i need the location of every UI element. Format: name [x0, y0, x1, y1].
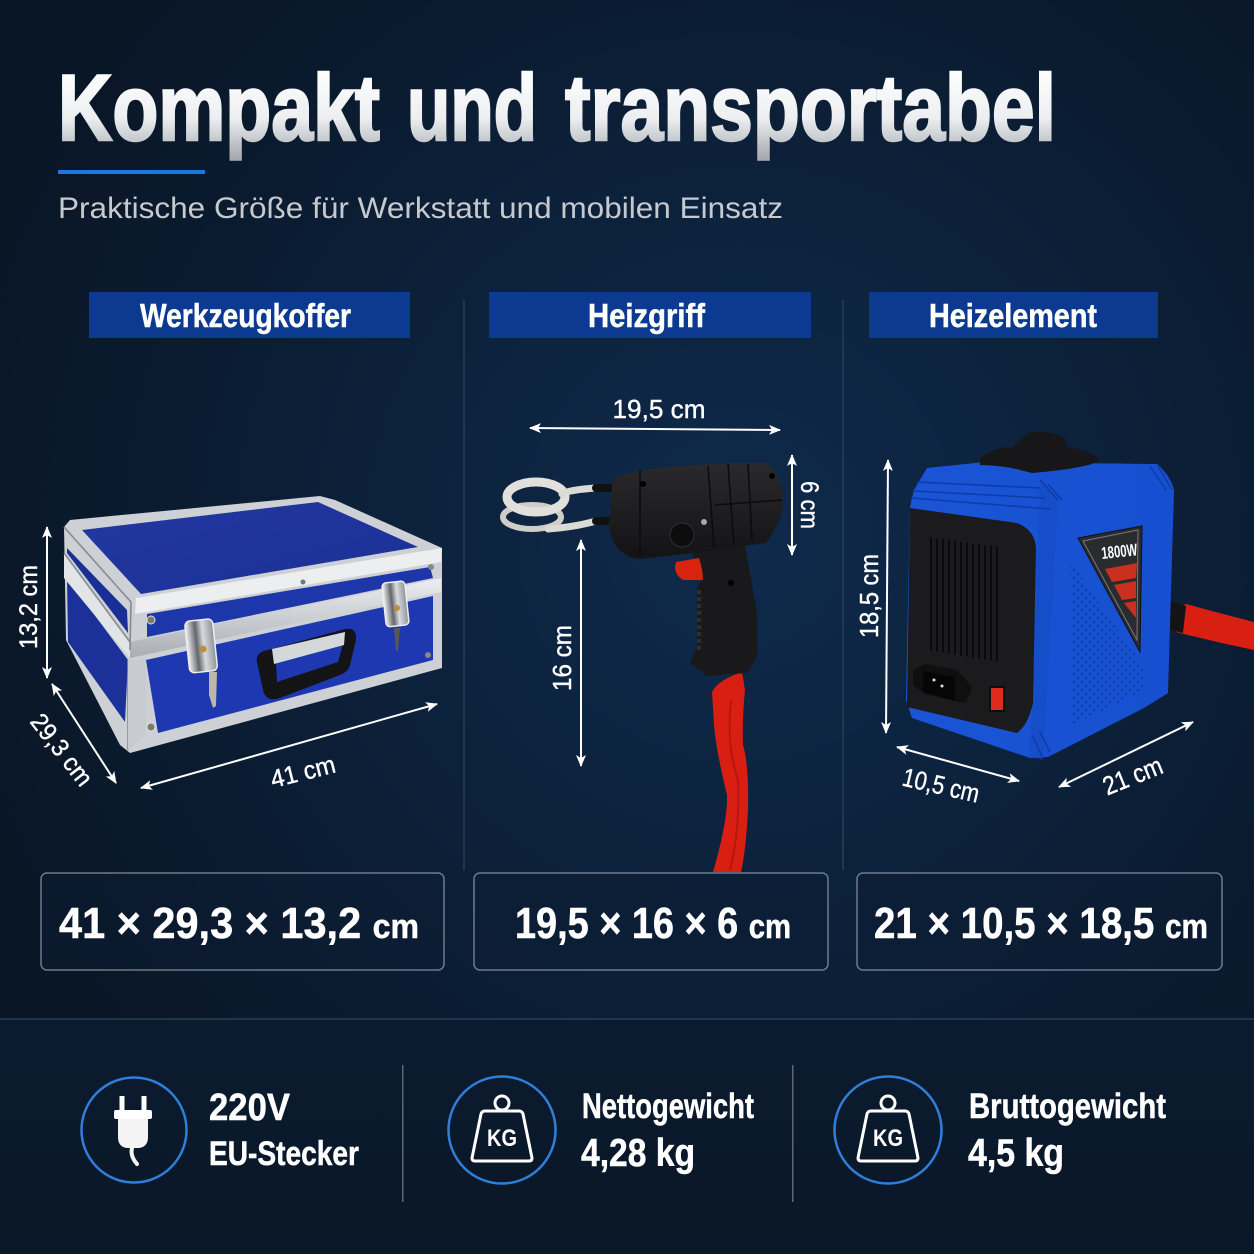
feature: plug — [82, 1078, 359, 1182]
gun photo — [503, 463, 783, 676]
feature: net weight — [448, 1076, 754, 1184]
dimension: length 16 cm: 16 cm — [547, 625, 577, 691]
dimension: width 19,5 cm: 19,5 cm — [612, 394, 706, 424]
icon: gross weight — [834, 1076, 942, 1184]
latch right — [382, 581, 409, 651]
subtitle: Praktische Größe für Werkstatt und mobilen Einsatz — [58, 192, 783, 225]
handle — [257, 629, 356, 699]
title accent line — [58, 170, 205, 174]
heading: Heizgriff — [489, 292, 811, 338]
dimension: depth 29,3 cm: 29,3 cm — [24, 708, 98, 792]
1800W badge: 1800W — [1100, 540, 1139, 563]
dimension: width 41 cm: 41 cm — [268, 751, 338, 794]
dimension: width 21 cm: 21 cm — [1098, 750, 1167, 801]
latch left — [184, 619, 218, 708]
dimension: height 13,2 cm: 13,2 cm — [15, 565, 43, 649]
text: Nettogewicht: Nettogewicht — [582, 1087, 754, 1126]
panel: tool case — [15, 496, 442, 794]
text: EU-Stecker: EU-Stecker — [209, 1135, 359, 1173]
1800W badge — [1078, 526, 1142, 652]
heading: Heizelement — [869, 292, 1158, 338]
text: Bruttogewicht: Bruttogewicht — [969, 1087, 1166, 1126]
carrying strap — [980, 432, 1100, 473]
output cable — [1172, 604, 1254, 650]
size box: heater: 21 × 10,5 × 18,5 cm — [874, 899, 1208, 948]
black control panel — [907, 508, 1036, 733]
dimension: width 21 cm — [1059, 722, 1193, 801]
dimension: height 6 cm — [792, 455, 823, 555]
heading: Heizgriff: Heizgriff — [588, 297, 706, 334]
knob — [670, 523, 694, 547]
panel: heating handle — [503, 394, 823, 872]
title — [58, 55, 1056, 160]
vent grille — [927, 537, 1000, 662]
size box: case: 41 × 29,3 × 13,2 cm — [59, 899, 419, 948]
title: transportabel — [565, 55, 1056, 160]
size box: handle — [474, 873, 828, 970]
text: 220V: 220V — [209, 1087, 291, 1129]
heading: Heizelement: Heizelement — [929, 297, 1097, 334]
icon: gross weight: KG — [873, 1125, 903, 1152]
induction coil — [503, 482, 616, 529]
size box: heater — [857, 873, 1222, 970]
red cable — [712, 672, 748, 872]
icon: net weight — [448, 1076, 556, 1184]
dimension: depth 29,3 cm — [24, 684, 116, 792]
size box: handle: 19,5 × 16 × 6 cm — [515, 899, 791, 948]
rocker switch — [990, 687, 1004, 711]
grip — [690, 545, 757, 676]
dimension: depth 10,5 cm — [897, 747, 1019, 809]
trigger — [675, 558, 703, 580]
text: 4,5 kg: 4,5 kg — [968, 1132, 1064, 1175]
heater photo — [906, 432, 1186, 760]
case photo — [64, 496, 442, 753]
title: Kompakt — [58, 55, 380, 160]
text: 4,28 kg: 4,28 kg — [581, 1132, 695, 1175]
heading: Werkzeugkoffer: Werkzeugkoffer — [140, 297, 351, 334]
heading: Werkzeugkoffer — [89, 292, 410, 338]
feature: gross weight — [834, 1076, 1166, 1184]
size box: case — [41, 873, 444, 970]
dimension: width 41 cm — [141, 704, 437, 794]
power socket — [913, 664, 972, 703]
dimension: height 6 cm: 6 cm — [795, 481, 823, 529]
icon: net weight: KG — [487, 1125, 517, 1152]
panel: heating element — [854, 432, 1254, 809]
icon: plug — [82, 1078, 186, 1182]
title: und — [407, 55, 537, 160]
dimension: depth 10,5 cm: 10,5 cm — [900, 762, 982, 809]
dimension: height 18,5 cm: 18,5 cm — [854, 554, 884, 638]
